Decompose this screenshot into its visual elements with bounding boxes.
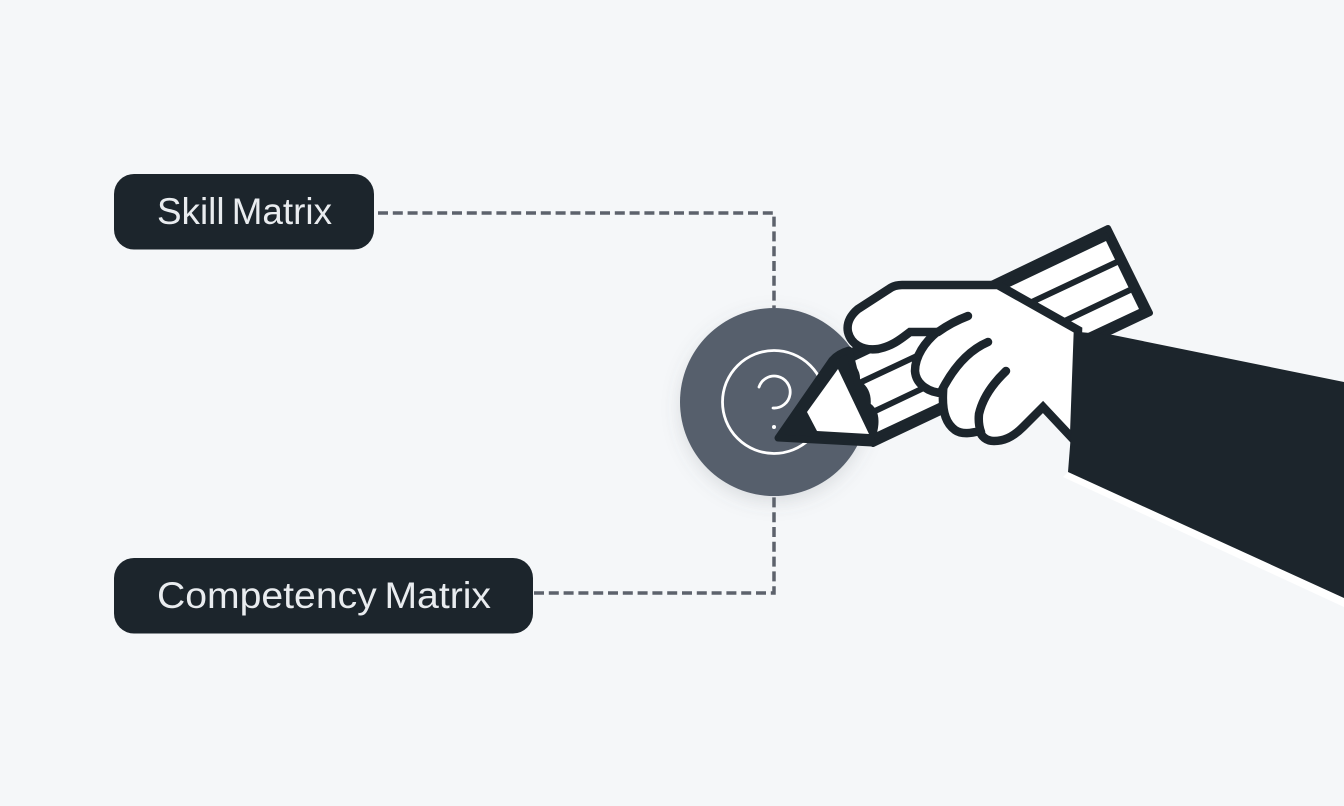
label: Competency Matrix [114,558,533,634]
sleeve highlight [1063,472,1344,607]
pencil body inner [850,241,1139,432]
icon: sleeve [1063,332,1344,607]
grey circle [680,308,868,496]
icon: question mark circle [680,308,868,496]
dashed connector: competency matrix to circle [534,496,774,593]
label: Skill Matrix [114,174,374,250]
pencil body outer [850,228,1150,444]
sleeve shape [1068,332,1344,598]
label box [114,558,533,634]
white ring [722,350,826,454]
question mark dot [772,425,776,429]
label text: Competency Matrix [157,575,492,616]
white pencil wood [807,369,869,434]
scalloped collar [843,362,874,434]
thumb crease [938,316,968,332]
lower finger crease [979,371,1006,432]
pencil stripes [855,262,1130,412]
dark pencil tip [778,350,872,443]
icon: pencil [778,228,1150,444]
question mark hook [759,376,790,408]
label text: Skill Matrix [157,191,332,232]
hand outline [848,285,1078,441]
icon: hand [848,285,1078,441]
finger crease [941,342,988,392]
label box [114,174,374,250]
dashed connector: skill matrix to circle [378,213,774,308]
